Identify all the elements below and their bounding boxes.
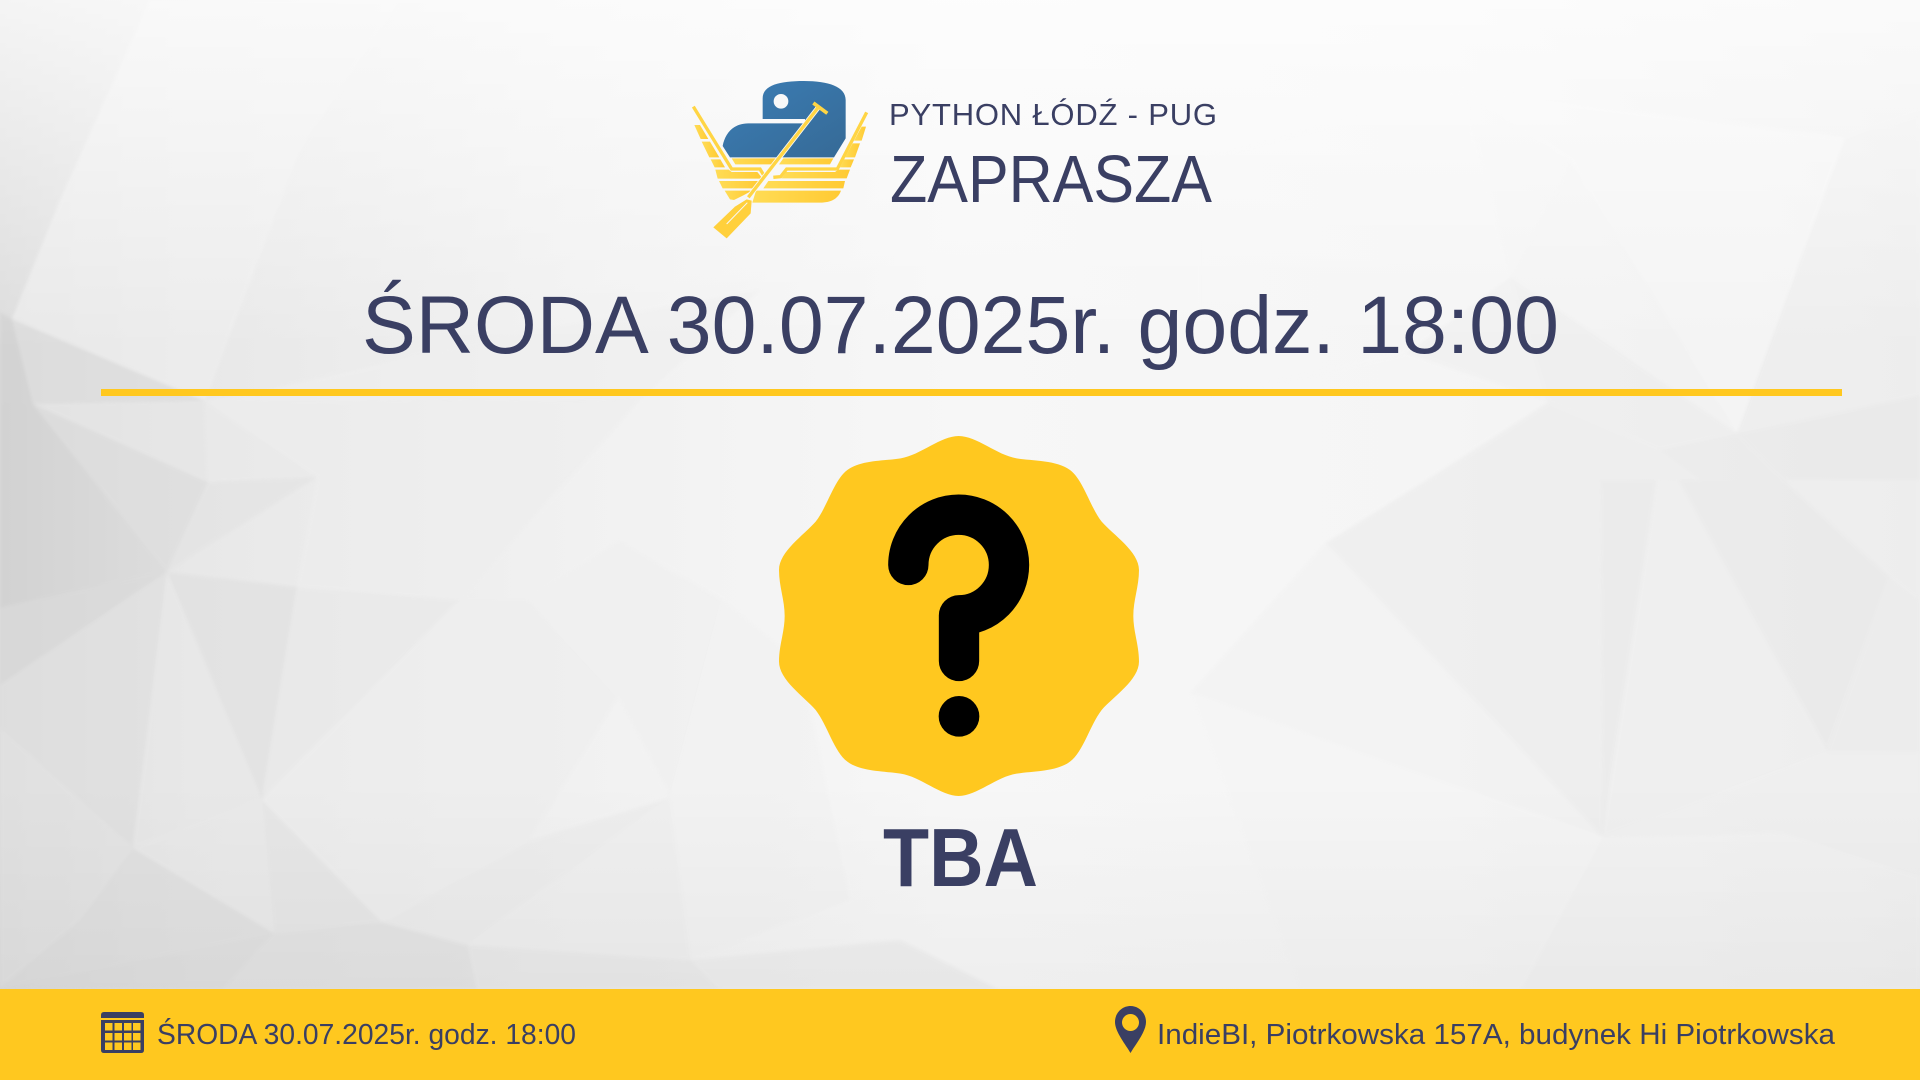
footer bar [0,989,1920,1080]
boat rails [693,107,867,177]
icon: calendar [101,1012,144,1053]
snake eye [774,94,788,109]
icon: question mark badge [779,436,1139,796]
icon: location pin [1115,1006,1146,1053]
oar [713,103,827,238]
footer address: IndieBI, Piotrkowska 157A, budynek Hi Piotrkowska [1157,1019,1836,1051]
question mark [908,515,1009,737]
heading: organiser: PYTHON ŁÓDŹ - PUG [889,97,1217,132]
boat hull bands [694,125,866,203]
footer date: ŚRODA 30.07.2025r. godz. 18:00 [157,1017,576,1051]
yellow divider [101,389,1842,396]
speaker label TBA: TBA [883,811,1038,904]
heading: invites: ZAPRASZA [890,142,1212,217]
logo: Python Łódź boat [693,81,867,238]
python snake body [723,81,846,157]
date and time title: ŚRODA 30.07.2025r. godz. 18:00 [362,280,1559,371]
wavy badge [779,436,1139,796]
